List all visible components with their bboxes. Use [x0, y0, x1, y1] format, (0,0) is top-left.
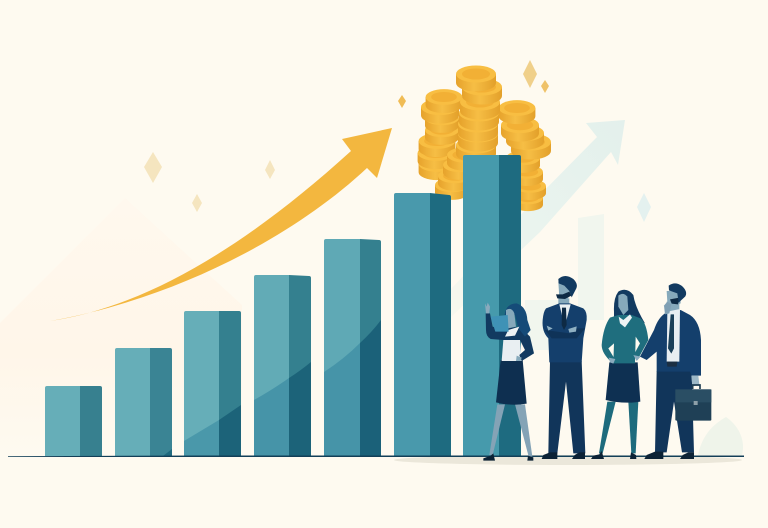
icon: briefcase: [675, 385, 711, 421]
bar 3: [184, 311, 241, 456]
sparkle: [398, 95, 406, 108]
sparkle: [523, 60, 537, 88]
ground shadow: [394, 455, 742, 465]
bar 5: [324, 239, 381, 456]
sparkle: [144, 152, 162, 183]
person: man with crossed arms: [542, 276, 587, 459]
bar 1: [45, 386, 102, 456]
coin stacks: [418, 66, 551, 211]
bar 6: [394, 193, 451, 456]
bar chart: [45, 155, 521, 456]
sparkle: [637, 193, 651, 222]
business team: [483, 276, 711, 461]
sparkle: [541, 80, 549, 93]
bar 4: [254, 275, 311, 456]
background shape: faint peach mountain: [0, 198, 242, 456]
coin stack: left: [418, 89, 462, 180]
growth arrow: [50, 128, 392, 321]
ground line: [8, 456, 744, 457]
person: woman with folder: [483, 303, 534, 461]
sparkle: [192, 194, 202, 212]
sparkle: [265, 160, 275, 179]
sparkles: [144, 60, 651, 222]
coin stack: right: [499, 100, 551, 211]
bar 7: [463, 155, 521, 456]
person: man with briefcase: [640, 283, 711, 459]
coin stack: centre: [435, 66, 502, 200]
background shape: faint teal arrow: [450, 120, 625, 318]
background shape: faint bush: [698, 417, 743, 455]
person: woman in teal jacket: [591, 290, 648, 459]
background shape: faint teal bars: [525, 214, 604, 350]
bar 2: [115, 348, 172, 456]
